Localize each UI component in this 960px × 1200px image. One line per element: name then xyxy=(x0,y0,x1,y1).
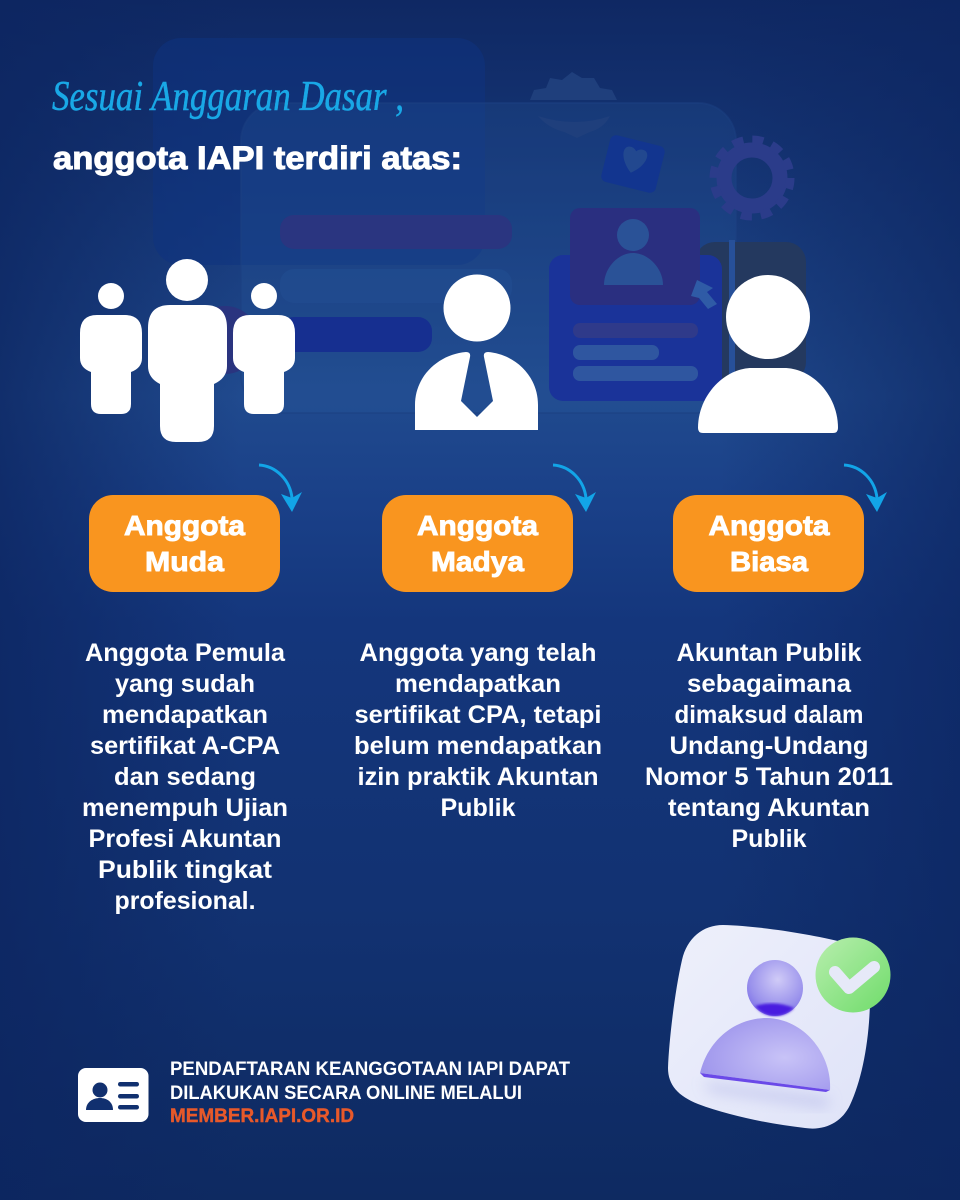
description xyxy=(354,639,602,822)
description xyxy=(645,639,893,853)
avatar head xyxy=(747,960,803,1016)
description: Nomor 5 Tahun 2011 xyxy=(645,763,893,791)
description: sertifikat CPA, tetapi xyxy=(354,701,602,729)
description: dimaksud dalam xyxy=(674,701,864,729)
description: mendapatkan xyxy=(102,701,268,729)
description: Profesi Akuntan xyxy=(88,825,282,853)
column: Anggota Muda xyxy=(82,465,302,915)
column: Anggota Madya xyxy=(354,465,602,822)
check badge xyxy=(816,938,890,1012)
icon: ID card xyxy=(78,1068,148,1122)
bold heading: anggota IAPI terdiri atas: xyxy=(53,140,462,176)
description: Anggota yang telah xyxy=(360,639,596,667)
arrow xyxy=(259,465,302,512)
description: Publik xyxy=(732,825,807,853)
description: sertifikat A-CPA xyxy=(90,732,280,760)
column: Anggota Biasa xyxy=(645,465,893,853)
badge: Biasa xyxy=(730,546,808,577)
description: izin praktik Akuntan xyxy=(358,763,598,791)
description: mendapatkan xyxy=(395,670,561,698)
badge xyxy=(382,495,573,592)
description: belum mendapatkan xyxy=(354,732,602,760)
icon: person with tie xyxy=(415,274,538,430)
badge xyxy=(673,495,864,592)
badge: Anggota xyxy=(417,510,538,541)
badge xyxy=(89,495,280,592)
arrow xyxy=(553,465,596,512)
description: yang sudah xyxy=(115,670,255,698)
arrow xyxy=(844,465,887,512)
description: Publik xyxy=(440,794,516,822)
avatar body xyxy=(700,1018,830,1092)
registration note: DILAKUKAN SECARA ONLINE MELALUI xyxy=(170,1083,522,1104)
icon: 3D profile card xyxy=(668,925,890,1129)
badge: Madya xyxy=(431,546,524,577)
description: menempuh Ujian xyxy=(82,794,288,822)
script heading: Sesuai Anggaran Dasar , xyxy=(52,74,404,120)
description xyxy=(82,639,288,915)
description: Akuntan Publik xyxy=(676,639,862,667)
badge: Anggota xyxy=(708,510,830,541)
badge: Anggota xyxy=(124,510,245,541)
registration note: PENDAFTARAN KEANGGOTAAN IAPI DAPAT xyxy=(170,1059,570,1080)
badge: Muda xyxy=(145,546,224,577)
icon: group of members xyxy=(80,259,295,442)
description: profesional. xyxy=(114,887,256,915)
title xyxy=(52,74,462,176)
registration note xyxy=(170,1059,570,1127)
description: Publik tingkat xyxy=(98,856,273,884)
description: dan sedang xyxy=(114,763,256,791)
background illustration xyxy=(153,38,806,413)
description: Undang-Undang xyxy=(670,732,868,760)
description: Anggota Pemula xyxy=(85,639,286,667)
registration note: MEMBER.IAPI.OR.ID xyxy=(170,1106,354,1127)
icon: person xyxy=(698,275,838,433)
description: sebagaimana xyxy=(687,670,852,698)
description: tentang Akuntan xyxy=(668,794,870,822)
